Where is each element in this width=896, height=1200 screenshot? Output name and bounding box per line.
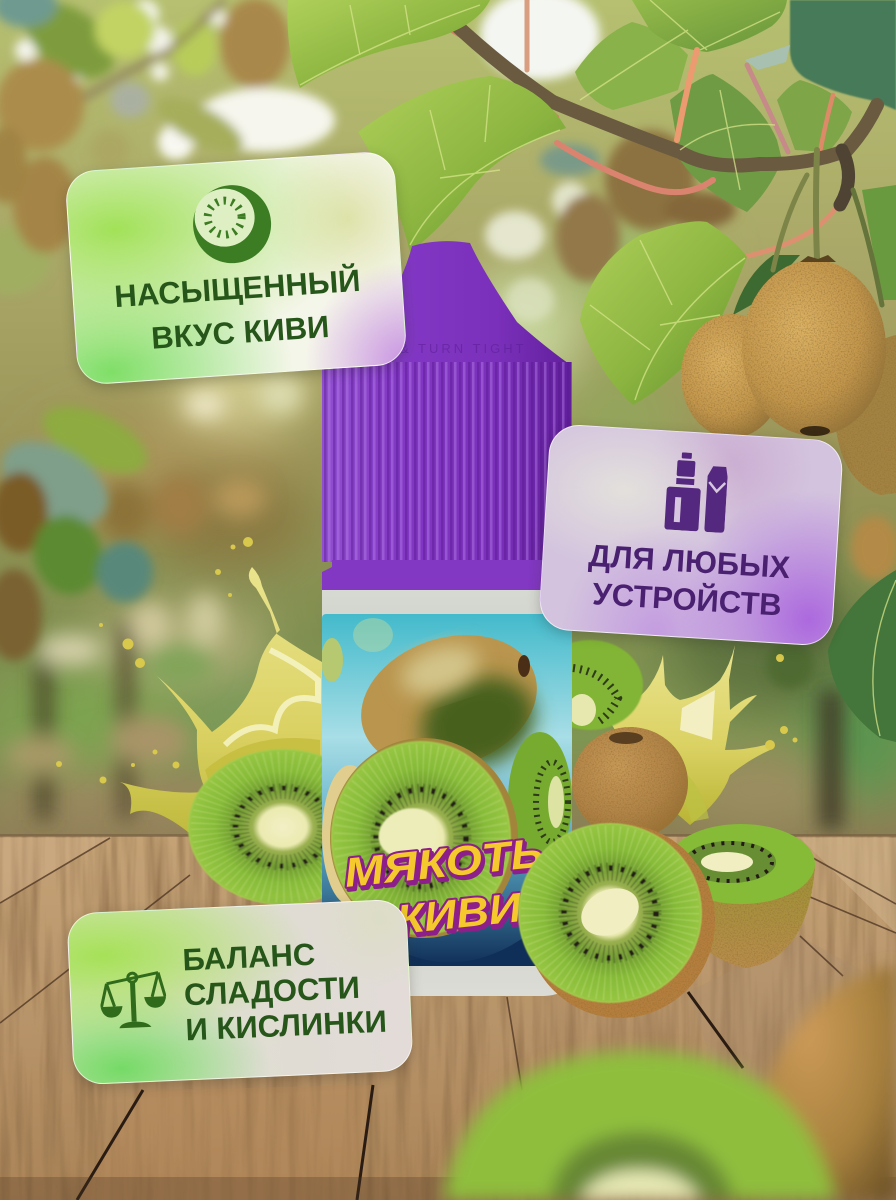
foreground: brown kiwi [762, 966, 896, 1200]
tree branches and stems [400, 0, 882, 305]
icon: vape devices [664, 452, 728, 533]
card: balance of sweetness and sourness [66, 899, 414, 1085]
foreground: kiwi slice [443, 1051, 835, 1200]
whole kiwi right of bottle [572, 727, 688, 839]
card: for any devices [538, 423, 844, 647]
bottle: glass body [322, 590, 572, 996]
bottle: product name [342, 829, 546, 943]
bottle: product name: МЯКОТЬ [342, 829, 546, 896]
large kiwi half in front [518, 823, 715, 1018]
kiwi half right, tilted [667, 824, 815, 968]
kiwi leaves (back) [575, 0, 896, 315]
heading: balance text: И КИСЛИНКИ [185, 1004, 388, 1047]
card: rich kiwi taste [64, 150, 408, 386]
wooden table [0, 834, 896, 1200]
heading: for any devices: УСТРОЙСТВ [591, 576, 783, 623]
icon: scales [100, 971, 166, 1028]
bottle [321, 241, 572, 996]
heading: for any devices: ДЛЯ ЛЮБЫХ [588, 538, 791, 585]
whole kiwis on the tree [681, 255, 896, 495]
bottle: ribbed cap [322, 362, 572, 562]
heading: rich kiwi taste: ВКУС КИВИ [150, 309, 330, 356]
bottle: cap spout [322, 241, 572, 366]
heading: for any devices [588, 538, 791, 623]
bottle: cap embossed text: & TURN TIGHT [400, 341, 527, 356]
bottle: cap collar [322, 560, 572, 590]
juice splashes [56, 537, 798, 860]
kiwi half left of bottle [188, 749, 378, 905]
kiwi slice behind bottle [537, 640, 643, 730]
heading: balance text [182, 937, 388, 1047]
bottle: product name: КИВИ [394, 884, 525, 943]
blurred orchard background [0, 0, 896, 840]
icon: kiwi [193, 185, 272, 264]
heading: balance text: БАЛАНС [182, 937, 316, 977]
heading: balance text: СЛАДОСТИ [183, 970, 361, 1012]
kiwi leaves (front) [288, 0, 896, 742]
heading: rich kiwi taste: НАСЫЩЕННЫЙ [113, 263, 361, 314]
heading: rich kiwi taste [113, 263, 361, 356]
bottle: label artwork [321, 613, 572, 966]
blurred foreground kiwis [443, 966, 896, 1200]
